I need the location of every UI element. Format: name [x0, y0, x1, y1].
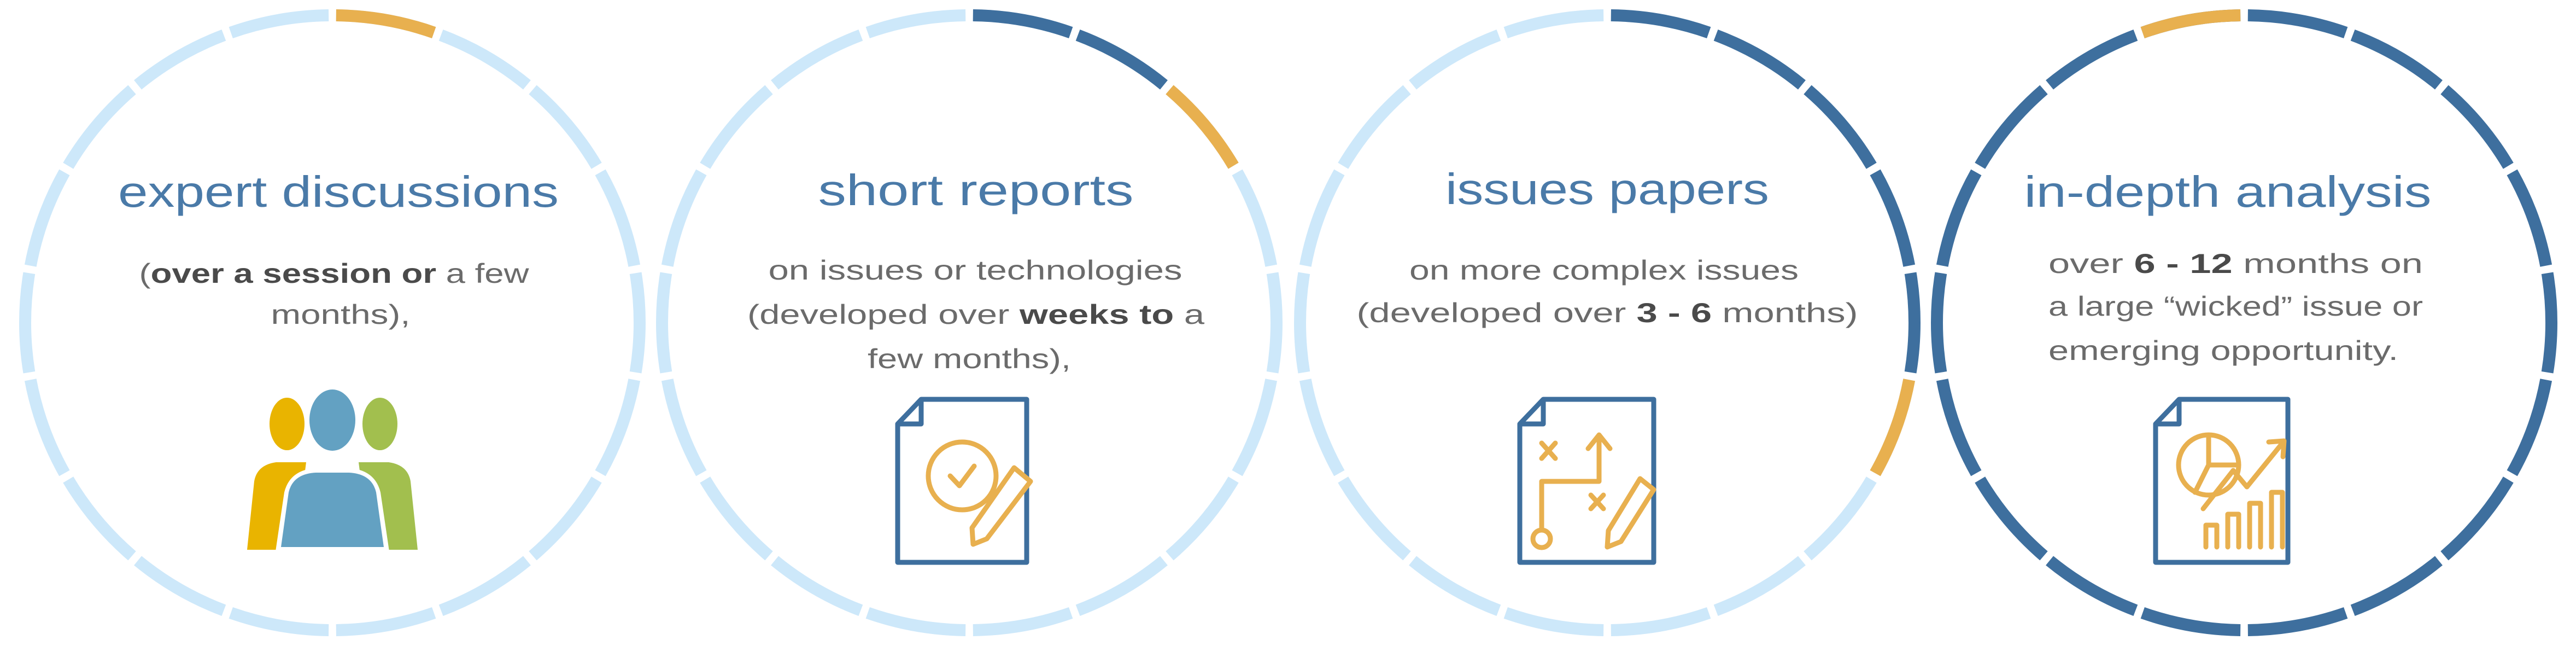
text block: in-depth analysis description: [2048, 248, 2423, 366]
panel: issues papers: [1251, 0, 1963, 663]
text block: issues papers description: (developed over 3 - 6 months): [1357, 298, 1858, 328]
text block: issues papers description: [1357, 255, 1858, 328]
text block: expert discussions description: [139, 258, 530, 330]
text block: short reports description: [747, 255, 1204, 374]
icon: document with check and pencil: [898, 399, 1031, 562]
text block: short reports description: few months),: [868, 344, 1071, 374]
panel: expert discussions: [25, 15, 640, 630]
ring: issues papers: [1251, 0, 1963, 663]
text block: in-depth analysis description: emerging opportunity.: [2048, 335, 2398, 366]
text block: short reports description: on issues or technologies: [769, 255, 1182, 286]
ring: in-depth analysis: [1851, 0, 2576, 663]
text block: expert discussions description: (over a session or a few: [139, 258, 530, 289]
heading: short reports: short reports: [818, 166, 1134, 214]
icon: people: [247, 385, 418, 551]
panel: short reports: [536, 0, 1402, 663]
text block: short reports description: (developed over weeks to a: [747, 299, 1204, 330]
text block: in-depth analysis description: a large “wicked” issue or: [2048, 291, 2423, 322]
text block: issues papers description: on more complex issues: [1409, 255, 1799, 286]
text block: expert discussions description: months),: [271, 299, 410, 330]
icon: document with pie chart and growth bars: [2156, 399, 2288, 562]
ring: expert discussions: [25, 15, 640, 630]
ring: short reports: [536, 0, 1402, 663]
heading: expert discussions: expert discussions: [118, 167, 559, 216]
text block: in-depth analysis description: over 6 - 12 months on: [2048, 248, 2423, 279]
heading: in-depth analysis: in-depth analysis: [2024, 167, 2432, 216]
heading: issues papers: issues papers: [1445, 165, 1769, 213]
icon: document with strategy map and pencil: [1520, 399, 1654, 562]
panel: in-depth analysis: [1851, 0, 2576, 663]
